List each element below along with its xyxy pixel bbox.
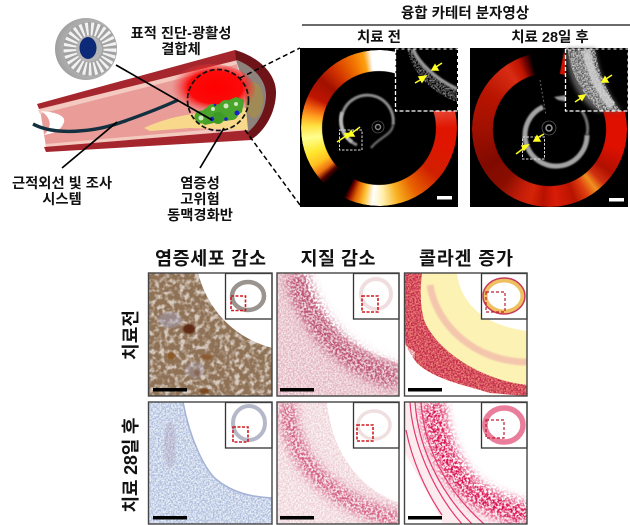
histology: matrix before: [277, 273, 399, 396]
artery lumen: [40, 58, 250, 147]
inset arrows: [575, 75, 612, 102]
plaque cap: [200, 66, 246, 125]
panel: OCT after 28 days background: [470, 48, 628, 207]
catheter wire: [33, 100, 178, 131]
insets: row 2: [226, 402, 527, 448]
vessel top wall: [37, 50, 238, 109]
OCT lumen before: [337, 95, 393, 150]
nanoparticle icon: [55, 18, 117, 80]
histology: collagen after: [404, 402, 530, 524]
inset cell 2: [354, 402, 399, 448]
brown stains: [167, 324, 213, 394]
heading: molecular imaging: 융합 카테터 분자영상: [401, 5, 529, 22]
inset arrows: [415, 63, 442, 83]
histology: inflammatory after: [148, 402, 272, 524]
inset cell 2: [354, 274, 399, 319]
inset cell 3: [482, 402, 527, 448]
heat ring before treatment: [301, 50, 457, 206]
cut face core: [245, 82, 263, 118]
leader line: plaque: [200, 128, 224, 168]
crimson cell band: [432, 402, 530, 516]
dashed plaque circle: [188, 70, 248, 130]
row label: after: 치료 28일 후: [121, 418, 141, 512]
inset cell 1: [226, 402, 272, 448]
panel frames: [148, 273, 527, 524]
scale bars: [153, 388, 442, 520]
heat ring after treatment: [472, 52, 627, 207]
left opening: [41, 111, 64, 135]
artery illustration: [33, 50, 276, 152]
red photoactivation glow: [167, 64, 255, 116]
row label: before: 치료전: [121, 310, 141, 360]
OCT inset before: [396, 49, 458, 111]
subheading: before: 치료 전: [357, 29, 401, 46]
dashed zoom line top: [240, 48, 300, 78]
OCT lumen after: [516, 80, 588, 166]
vessel inner lining: [38, 58, 250, 150]
heading rule: [302, 24, 630, 26]
label: plaque: 동맥경화반: [167, 207, 233, 224]
artery end cap: [235, 50, 276, 140]
yellow arrows: [337, 127, 360, 142]
histology: matrix after: [277, 402, 399, 524]
panel: OCT before treatment background: [300, 48, 458, 207]
yellow arrows: [516, 134, 544, 154]
label: targeted conjugate: 표적 진단-광활성: [131, 26, 231, 42]
catheter rings: [542, 121, 556, 135]
tissue: [148, 273, 272, 396]
label: NIR system: 근적외선 빛 조사: [12, 176, 112, 192]
insets: row 1: [226, 274, 527, 319]
histology: collagen before: [404, 273, 527, 396]
column heading: inflammatory cells: 염증세포 감소: [155, 248, 266, 269]
label: NIR system: 시스템: [42, 191, 82, 208]
yellow lipid core: [144, 108, 248, 131]
label: targeted conjugate: 결합체: [161, 41, 201, 58]
catheter rings: [372, 121, 384, 133]
leader line: particle to cells: [116, 65, 212, 120]
column heading: matrix: 지질 감소: [300, 248, 376, 269]
leader line: irradiation system: [62, 122, 117, 168]
scale bar before: [437, 196, 452, 200]
inset cell 1: [226, 274, 272, 319]
column heading: collagen: 콜라겐 증가: [419, 248, 513, 269]
label: plaque: 고위험: [180, 191, 220, 208]
histology: inflammatory before: [148, 273, 272, 396]
OCT inset after: [566, 49, 628, 111]
scale bar after: [609, 198, 624, 202]
collagen fibres: [406, 402, 484, 524]
dashed selection box: [340, 130, 362, 150]
vessel bottom wall: [44, 130, 252, 152]
dashed zoom line bottom: [245, 130, 300, 205]
label: plaque: 염증성: [180, 176, 220, 192]
subheading: after 28 days: 치료 28일 후: [511, 29, 589, 46]
dashed selection box: [522, 137, 544, 159]
guide wire artefact: [540, 80, 546, 115]
cut face: [236, 60, 266, 132]
green inflammatory cells: [194, 97, 244, 125]
inset cell 3: [482, 274, 527, 319]
